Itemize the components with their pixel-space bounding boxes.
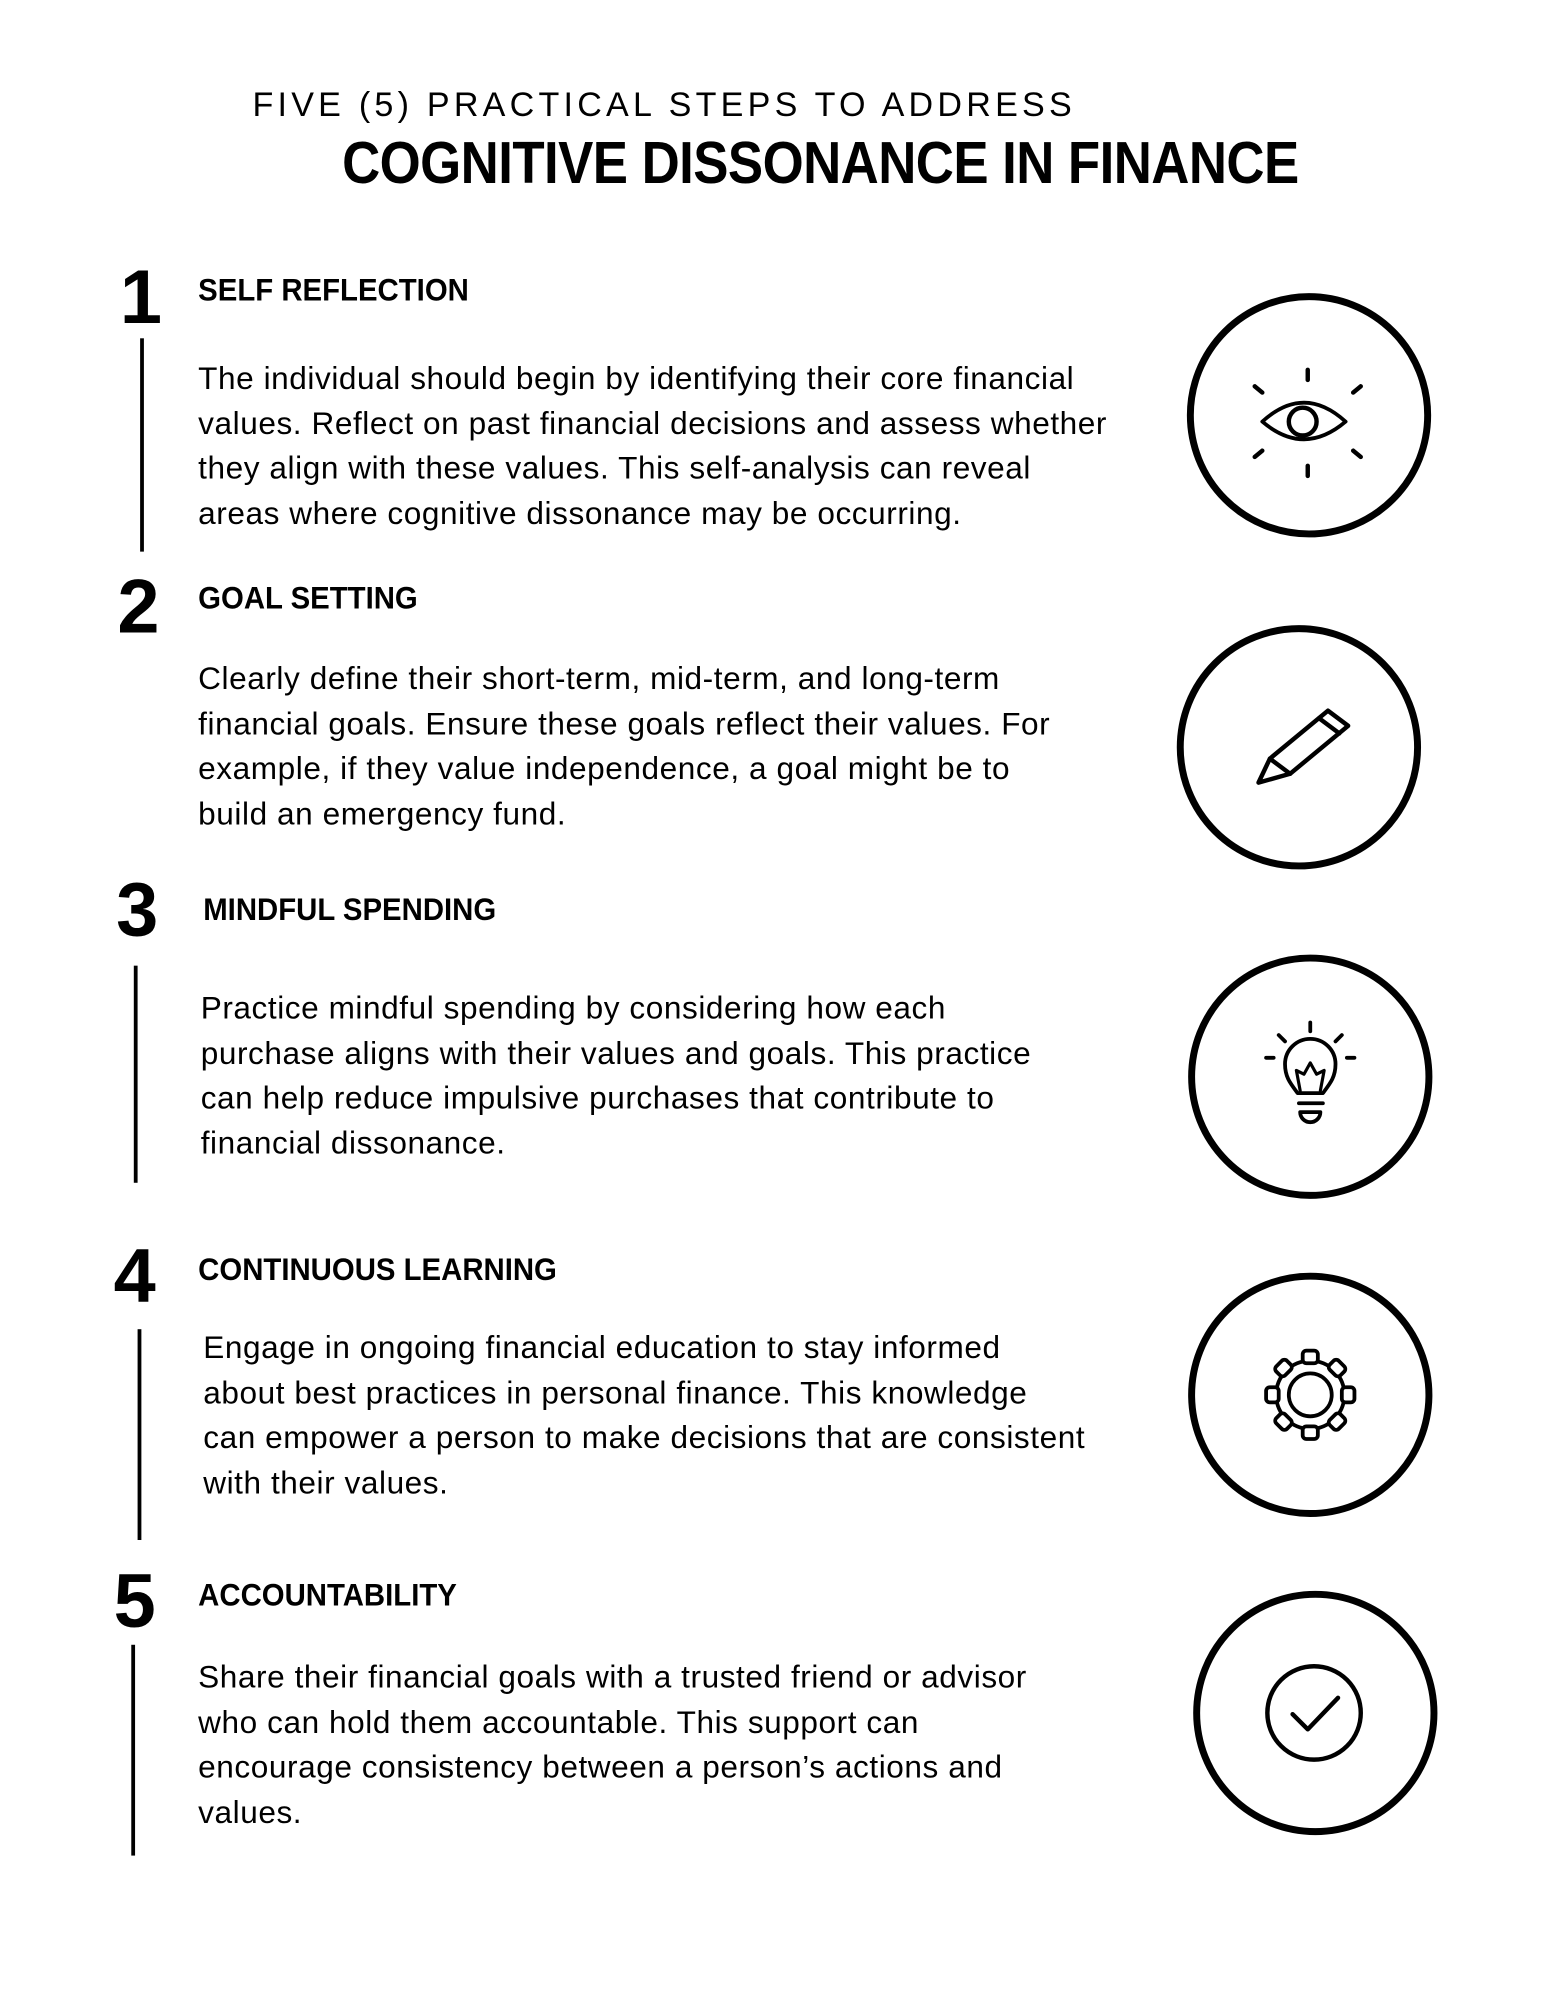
number 3: 3 [116, 867, 158, 952]
step 2 [117, 564, 1050, 831]
text: self reflection [198, 361, 1107, 531]
text: accountability: who can hold them accountable. This support can [198, 1705, 919, 1740]
icon: light bulb [1192, 958, 1429, 1195]
text: mindful spending: Practice mindful spending by considering how each [201, 991, 946, 1026]
text: goal setting: Clearly define their short-term, mid-term, and long-term [198, 661, 1000, 697]
icon: check mark [1197, 1594, 1434, 1832]
number 5: 5 [114, 1559, 156, 1644]
heading: self reflection: SELF REFLECTION [198, 273, 469, 308]
icon: gear [1192, 1276, 1429, 1513]
number 2: 2 [117, 564, 160, 649]
text: goal setting: financial goals. Ensure these goals reflect their values. For [198, 706, 1050, 742]
step 3 [116, 867, 1031, 1183]
text: self reflection: areas where cognitive dissonance may be occurring. [198, 495, 962, 531]
subtitle: FIVE (5) PRACTICAL STEPS TO ADDRESS [252, 86, 1076, 124]
heading: accountability: ACCOUNTABILITY [198, 1578, 457, 1613]
heading: mindful spending: MINDFUL SPENDING [203, 892, 496, 928]
text: continuous learning [203, 1330, 1085, 1500]
number 4: 4 [114, 1233, 156, 1318]
text: self reflection: they align with these values. This self-analysis can reveal [198, 451, 1031, 486]
timeline line 1 [140, 338, 143, 552]
text: continuous learning: can empower a person to make decisions that are consistent [203, 1420, 1085, 1455]
text: accountability: encourage consistency between a person’s actions and [198, 1750, 1003, 1785]
text: continuous learning: about best practices in personal finance. This knowledge [203, 1375, 1027, 1411]
text: goal setting [198, 661, 1050, 831]
text: mindful spending: purchase aligns with their values and goals. This practice [201, 1036, 1031, 1071]
text: continuous learning: Engage in ongoing financial education to stay informed [203, 1330, 1001, 1366]
timeline line 4 [138, 1329, 141, 1540]
text: self reflection: The individual should begin by identifying their core financial [198, 361, 1074, 396]
text: mindful spending: financial dissonance. [201, 1125, 506, 1161]
timeline line 5 [131, 1645, 134, 1856]
text: goal setting: build an emergency fund. [198, 796, 566, 831]
step 1 [120, 255, 1107, 552]
timeline line 3 [134, 966, 137, 1183]
step 5 [114, 1559, 1027, 1856]
text: mindful spending [201, 991, 1031, 1161]
text: goal setting: example, if they value independence, a goal might be to [198, 751, 1010, 786]
title: COGNITIVE DISSONANCE IN FINANCE [342, 129, 1299, 196]
icon: pencil [1180, 629, 1418, 866]
text: accountability [198, 1660, 1027, 1830]
heading: continuous learning: CONTINUOUS LEARNING [198, 1252, 557, 1288]
icon: eye [1190, 297, 1428, 534]
text: continuous learning: with their values. [203, 1465, 448, 1500]
number 1: 1 [120, 255, 162, 340]
text: self reflection: values. Reflect on past financial decisions and assess whether [198, 406, 1107, 441]
text: accountability: Share their financial goals with a trusted friend or advisor [198, 1660, 1027, 1695]
step 4 [114, 1233, 1085, 1540]
text: mindful spending: can help reduce impulsive purchases that contribute to [201, 1081, 994, 1116]
heading: goal setting: GOAL SETTING [198, 581, 418, 616]
text: accountability: values. [198, 1794, 302, 1830]
